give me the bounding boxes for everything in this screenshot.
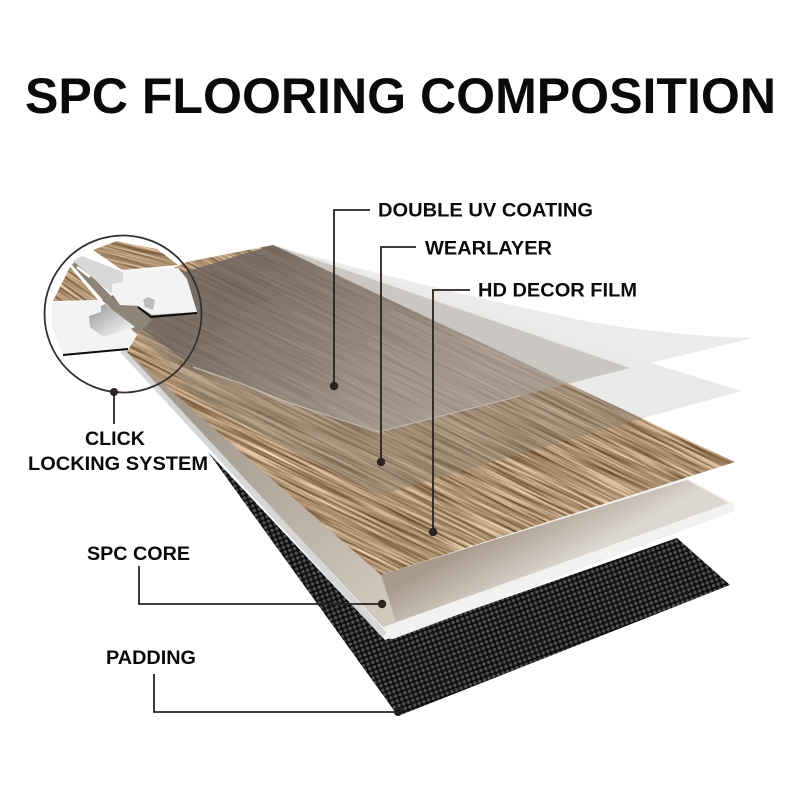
callout: wearlayer (377, 238, 552, 466)
lens: upper plank backing (138, 307, 197, 317)
overlay: uv coating over decor (102, 245, 568, 432)
callout: double uv coating (330, 200, 593, 390)
callout: spc core: SPC CORE (87, 544, 190, 565)
layer: wearlayer sheet (273, 245, 741, 495)
layer: double uv coating sheet (273, 245, 753, 432)
layer: hd decor film (102, 245, 735, 575)
lens: tongue notch (143, 297, 155, 310)
lens: lower wood (53, 267, 98, 301)
lens: joint band (72, 260, 152, 334)
lens: upper wood (93, 241, 178, 270)
callout: double uv coating: DOUBLE UV COATING (378, 200, 593, 222)
lens: groove (89, 304, 135, 337)
lens: upper plank white profile (112, 268, 197, 315)
layer: spc core (127, 352, 729, 627)
layer: core left shade (127, 352, 396, 627)
highlight: uv sheet front edge (193, 367, 520, 432)
overlay: wearlayer over decor (102, 248, 642, 495)
lens: lower plank white profile (52, 300, 137, 354)
lens: joint slit (77, 267, 90, 277)
lens: lower plank backing (63, 349, 128, 355)
click locking detail lens (44, 234, 202, 394)
lens: upper plank top strip (73, 256, 123, 294)
callout: wearlayer: WEARLAYER (425, 238, 552, 260)
callout: click locking system: LOCKING SYSTEM (28, 454, 208, 475)
callout: click locking system: CLICK (85, 429, 145, 450)
title: SPC FLOORING COMPOSITION (25, 68, 776, 124)
layer: padding (208, 452, 730, 716)
callout: padding (106, 648, 402, 716)
layer: core side edge (120, 348, 386, 638)
layer: white core edge (120, 245, 735, 639)
flooring plank exploded layers (102, 245, 752, 716)
callout: hd decor film: HD DECOR FILM (478, 280, 637, 302)
callout: padding: PADDING (106, 648, 196, 669)
lens: ring (44, 236, 202, 392)
layer: film overlap (273, 245, 630, 401)
callout: spc core (87, 544, 386, 608)
callout: hd decor film (429, 280, 637, 536)
callout: click locking system (28, 388, 208, 475)
